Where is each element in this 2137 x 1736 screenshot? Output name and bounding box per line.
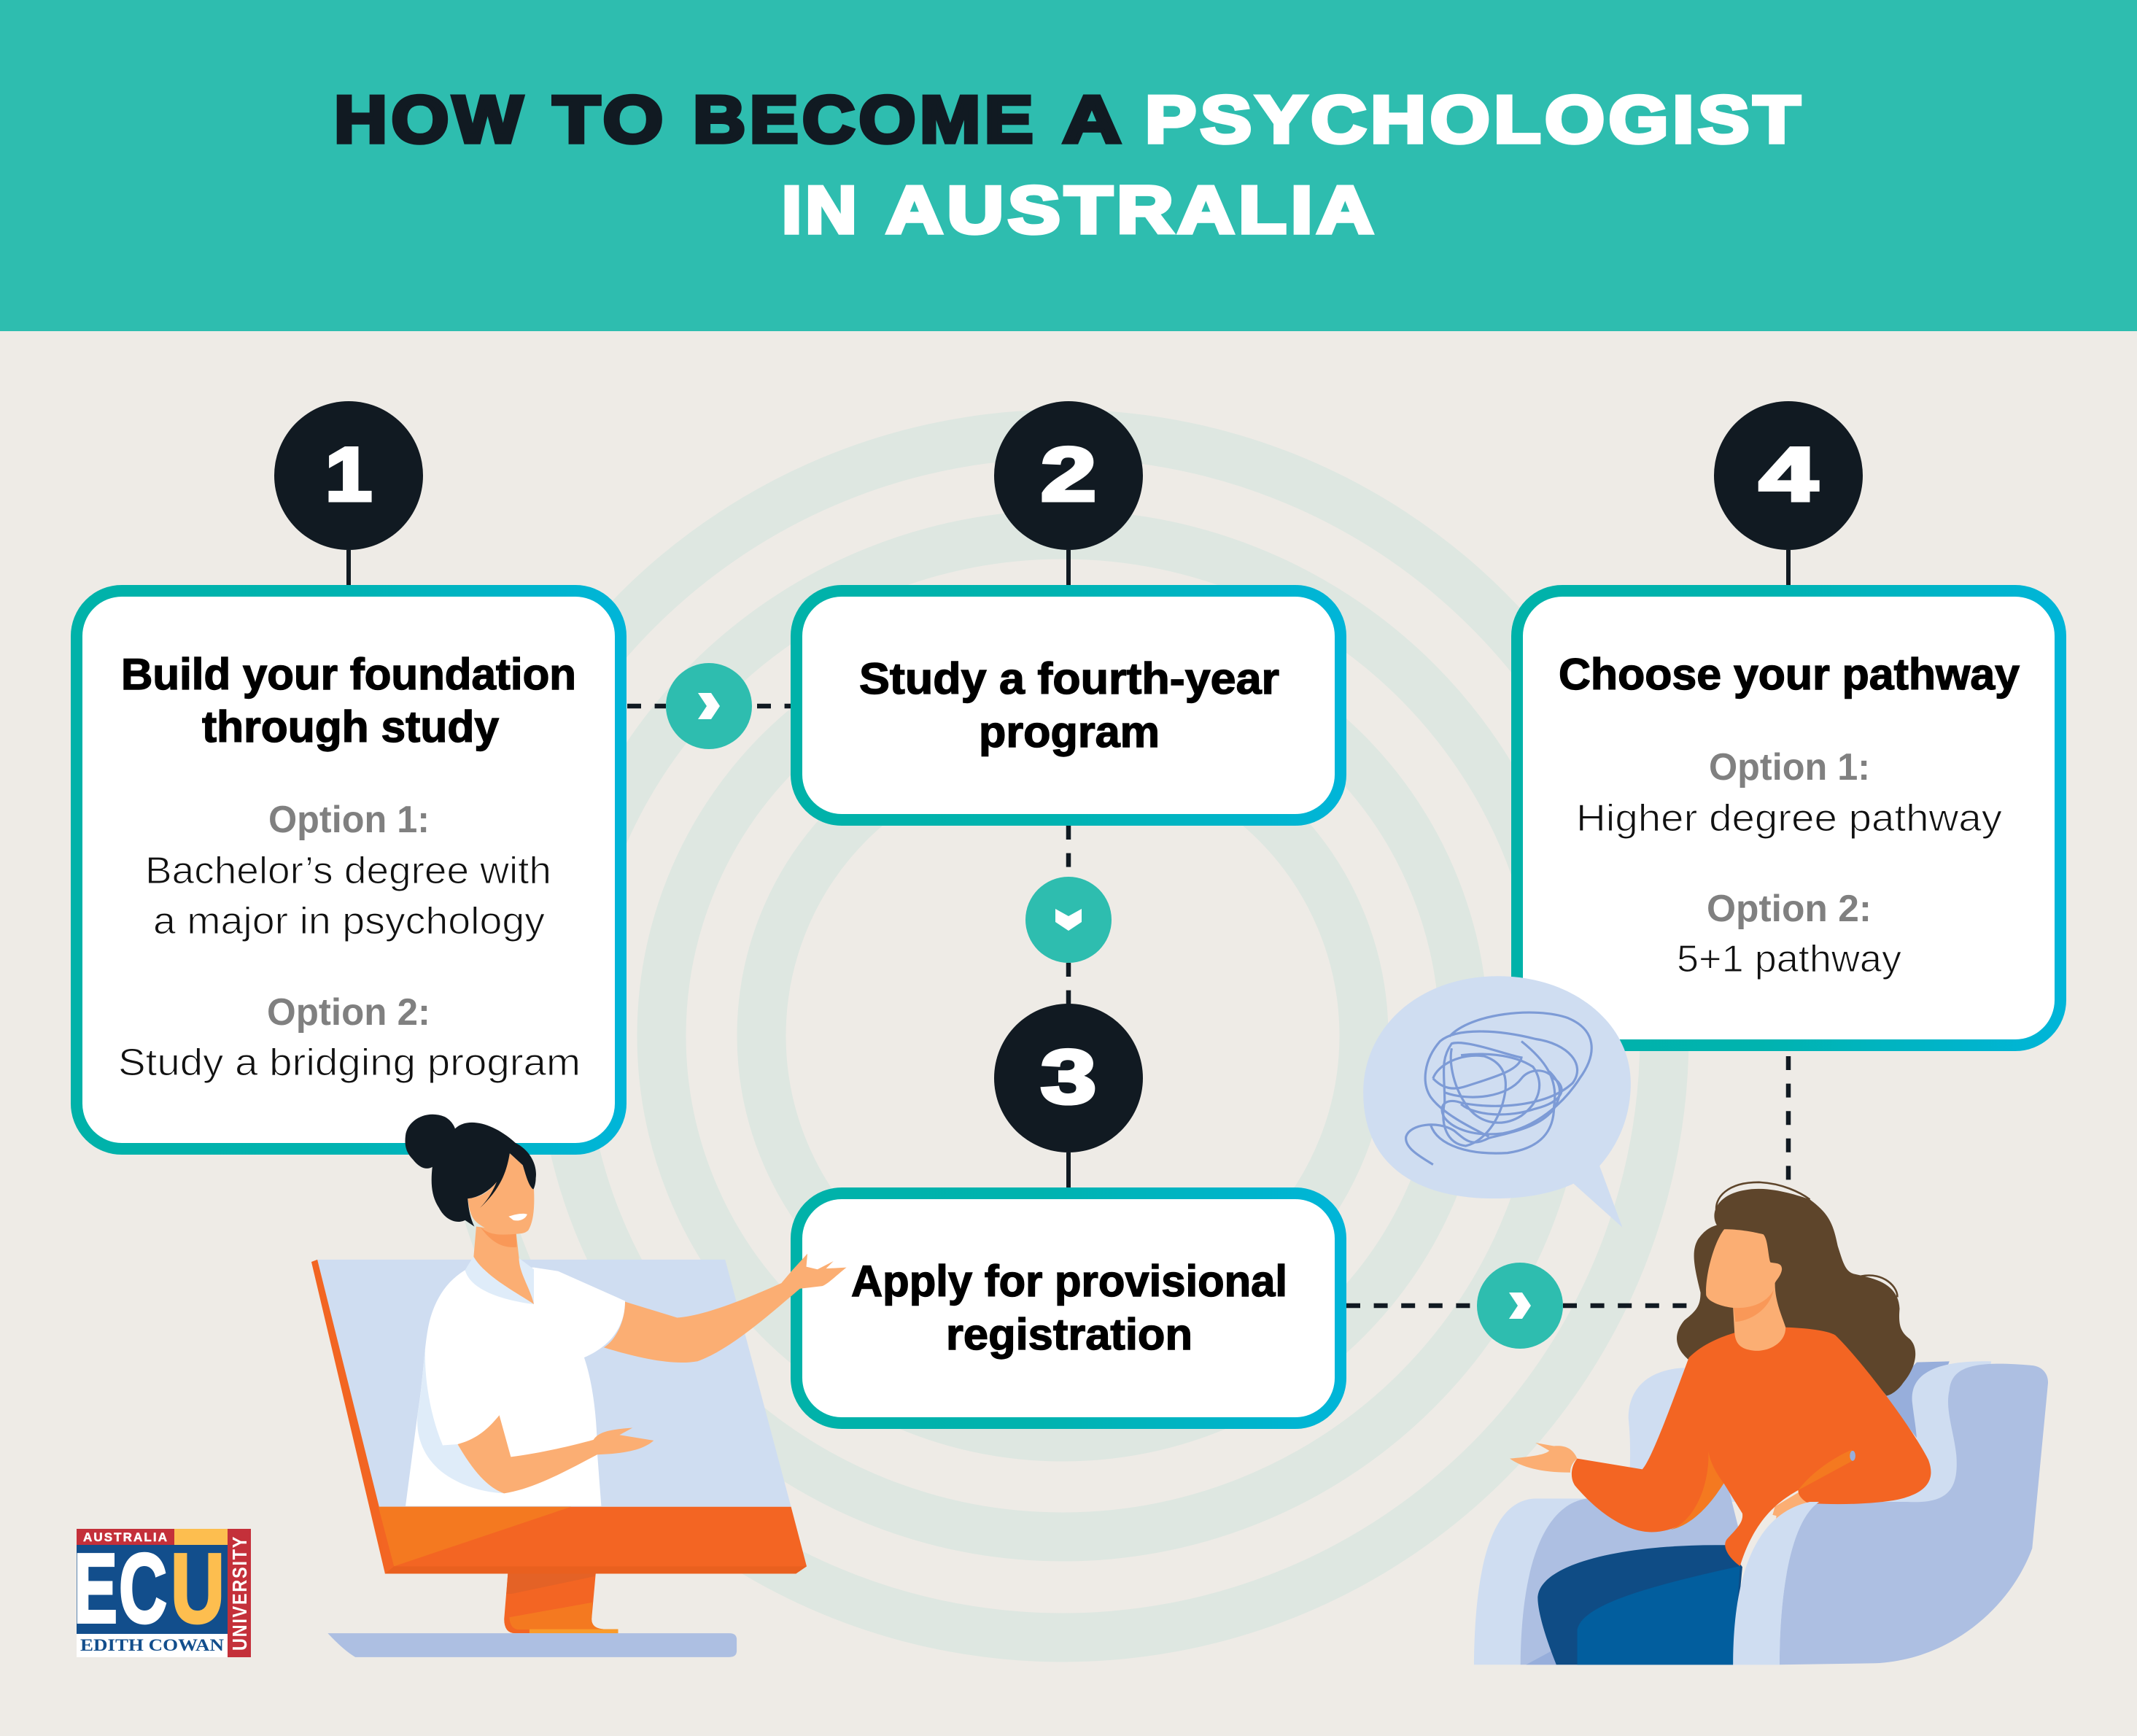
header banner — [0, 0, 2137, 331]
step 1 option 1: a major in psychology — [153, 900, 545, 942]
step 1 option 2 — [118, 991, 581, 1084]
step 1 option 1: Bachelor’s degree with — [145, 850, 551, 892]
hands — [1510, 1443, 1810, 1537]
step 2 number badge: 2 — [1041, 433, 1096, 517]
title: A — [1063, 83, 1121, 157]
step 2 heading: program — [979, 708, 1160, 756]
title — [334, 83, 1804, 247]
panel: step 3 provisional registration — [796, 1193, 1341, 1423]
title: PSYCHOLOGIST — [1145, 83, 1804, 157]
step 1 heading: through study — [202, 702, 500, 751]
step 4 heading: Choose your pathway — [1559, 650, 2020, 699]
hair — [1677, 1189, 1915, 1396]
thought bubble with scribble — [1363, 976, 1631, 1228]
step 3 number badge: 3 — [1041, 1035, 1096, 1120]
sweater — [1572, 1328, 1931, 1566]
step 1 option 2: Option 2: — [267, 991, 430, 1034]
logo: ECU Edith Cowan University: E — [74, 1533, 117, 1643]
step 1 heading: Build your foundation — [121, 650, 576, 699]
step 4 option 2 — [1677, 888, 1901, 980]
connectors between steps — [349, 550, 1788, 1306]
step 1 option 2: Study a bridging program — [118, 1042, 581, 1084]
illustration: woman at monitor — [311, 1115, 847, 1657]
jeans — [1537, 1545, 1742, 1665]
logo: ECU Edith Cowan University: C — [119, 1533, 167, 1643]
armchair — [1474, 1361, 2048, 1665]
title: AUSTRALIA — [886, 174, 1378, 247]
step 4 option 1: Higher degree pathway — [1576, 797, 2002, 840]
step 4 option 2: 5+1 pathway — [1677, 938, 1901, 980]
arrow: step 3 to step 4 — [1477, 1263, 1563, 1349]
step 1 option 1 — [145, 799, 551, 942]
title: TO — [553, 83, 667, 157]
step 4 number badge: 4 — [1759, 433, 1818, 517]
step 2 number badge — [994, 401, 1143, 550]
arrow: step 1 to step 2 — [666, 663, 752, 749]
panel: step 4 choose your pathway — [1517, 591, 2060, 1045]
step 1 heading — [121, 650, 576, 751]
illustration: seated woman with thought bubble — [1363, 976, 2048, 1665]
logo: ECU Edith Cowan University: U — [171, 1533, 225, 1643]
title: IN — [782, 174, 861, 247]
panel: step 2 fourth-year program — [796, 591, 1341, 820]
logo: ECU Edith Cowan University — [74, 1529, 251, 1657]
step 3 number badge — [994, 1004, 1143, 1152]
step 2 heading — [859, 654, 1279, 756]
step 2 heading: Study a fourth-year — [859, 654, 1279, 703]
step 1 number badge — [274, 401, 423, 550]
logo: ECU Edith Cowan University: UNIVERSITY — [228, 1535, 251, 1651]
step 1 option 1: Option 1: — [268, 799, 430, 841]
step 4 option 2: Option 2: — [1707, 888, 1872, 930]
title: HOW — [334, 83, 527, 157]
step 4 option 1 — [1576, 746, 2002, 840]
woman figure — [406, 1115, 847, 1506]
monitor — [311, 1260, 807, 1657]
logo: ECU Edith Cowan University: EDITH COWAN — [80, 1636, 224, 1654]
step 3 heading: registration — [946, 1310, 1192, 1359]
logo: ECU Edith Cowan University: AUSTRALIA — [83, 1530, 167, 1544]
arrow: step 2 to step 3 — [1025, 877, 1112, 963]
face and neck — [1706, 1229, 1785, 1351]
step 4 number badge — [1714, 401, 1863, 550]
panel: step 1 build your foundation — [77, 591, 621, 1149]
step 4 option 1: Option 1: — [1709, 746, 1870, 788]
step 1 number badge: 1 — [325, 433, 372, 517]
title: BECOME — [693, 83, 1037, 157]
step 3 heading — [851, 1257, 1287, 1359]
step 3 heading: Apply for provisional — [851, 1257, 1287, 1306]
